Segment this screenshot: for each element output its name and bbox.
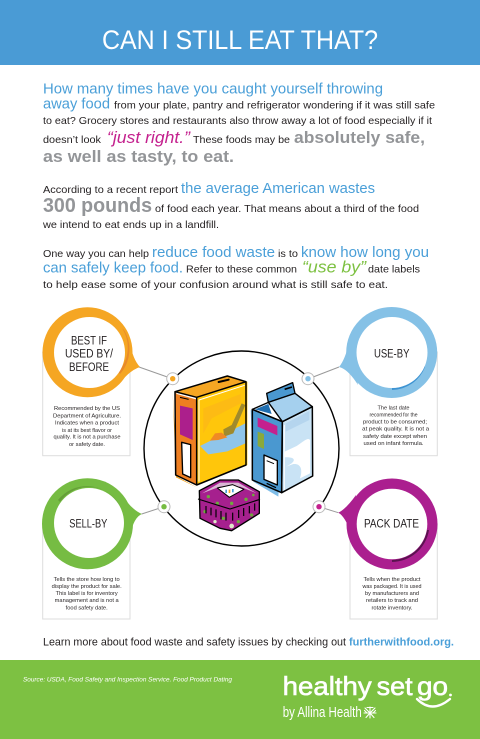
intro paragraph: as well as tasty, to eat. (43, 147, 234, 166)
description (362, 577, 422, 612)
marker: orange node (167, 373, 179, 385)
intro paragraph: absolutely safe, (294, 128, 425, 147)
advice paragraph: know how long you (301, 244, 429, 261)
marker: green node (158, 501, 170, 513)
description: retailers to track and (366, 598, 418, 604)
intro paragraph: from your plate, pantry and refrigerator wondering if it was still safe (114, 100, 435, 112)
description: Indicates when a product (55, 420, 119, 426)
logo: healthy set go by Allina Health: by Allina Health (283, 705, 362, 721)
label: USE-BY (374, 348, 410, 360)
description: Tells the store how long to (54, 577, 120, 583)
advice paragraph: can safely keep food. (43, 260, 183, 276)
advice paragraph: to help ease some of your confusion around what is still safe to eat. (43, 280, 388, 291)
advice paragraph: date labels (368, 264, 420, 276)
description: This label is for inventory (56, 591, 118, 597)
description (53, 406, 121, 448)
label (65, 335, 114, 374)
description: The last date (378, 406, 410, 412)
advice paragraph: Refer to these common (186, 264, 297, 276)
advice paragraph (43, 244, 429, 291)
description: food safety date. (66, 606, 108, 612)
description: display the product for sale. (52, 584, 122, 590)
description (52, 577, 122, 612)
call to action: Learn more about food waste and safety issues by checking out (43, 636, 347, 648)
statistic paragraph: 300 pounds (43, 194, 152, 217)
description: or safety date. (69, 442, 105, 448)
intro paragraph: doesn’t look (43, 135, 102, 146)
advice paragraph: “use by” (302, 258, 368, 276)
source note: Source: USDA, Food Safety and Inspection Service. Food Product Dating (23, 677, 232, 684)
description: Recommended by the US (54, 406, 120, 412)
description: by manufacturers and (365, 591, 419, 597)
description: recommended for the (370, 412, 418, 418)
icon: milk carton (251, 383, 313, 497)
logo: healthy set go by Allina Health: set (377, 671, 414, 701)
intro paragraph (43, 80, 435, 166)
illustration: food packages (173, 376, 313, 531)
logo: healthy set go by Allina Health: healthy (283, 671, 372, 701)
statistic paragraph: the average American wastes (181, 180, 375, 197)
panel: use-by (302, 307, 437, 456)
advice paragraph: is to (278, 249, 298, 260)
logo: healthy set go by Allina Health: go (417, 671, 448, 701)
icon: berry container (198, 480, 260, 531)
central circle (144, 351, 339, 546)
intro paragraph: away food (43, 96, 110, 112)
statistic paragraph: of food each year. That means about a third of the food (155, 204, 419, 215)
description: management and is not a (55, 598, 120, 604)
icon: Allina flower (364, 707, 376, 718)
title: CAN I STILL EAT THAT? (102, 25, 378, 55)
statistic paragraph (42, 180, 419, 231)
description: at peak quality. It is not a (362, 427, 430, 433)
description (362, 406, 430, 447)
description: used on infant formula. (364, 441, 424, 447)
intro paragraph: These foods may be (193, 135, 290, 146)
advice paragraph: One way you can help (43, 249, 149, 260)
label: SELL-BY (69, 519, 108, 531)
description: is at its best flavor or (62, 428, 112, 434)
label: BEFORE (69, 362, 109, 374)
statistic paragraph: we intend to eat ends up in a landfill. (42, 220, 219, 231)
header banner (0, 0, 480, 65)
label: USED BY/ (65, 349, 114, 361)
call to action: furtherwithfood.org. (349, 636, 454, 648)
panel: pack date (313, 478, 438, 619)
marker: magenta node (313, 501, 325, 513)
icon: cereal box (173, 376, 247, 487)
footer band (0, 660, 480, 739)
description: rotate inventory. (372, 606, 413, 612)
panel: sell-by (42, 478, 170, 619)
description: was packaged. It is used (362, 584, 422, 590)
intro paragraph: How many times have you caught yourself throwing (43, 80, 383, 98)
marker: blue node (302, 373, 314, 385)
label: PACK DATE (364, 519, 419, 531)
intro paragraph: to eat? Grocery stores and restaurants also throw away a lot of food especially if it (43, 116, 432, 127)
advice paragraph: reduce food waste (152, 244, 275, 261)
label: BEST IF (71, 335, 107, 347)
description: Tells when the product (364, 577, 421, 583)
logo: healthy set go by Allina Health (283, 671, 452, 721)
description: safety date except when (363, 434, 427, 440)
description: product to be consumed; (363, 420, 427, 426)
statistic paragraph: According to a recent report (43, 185, 178, 196)
panel: best if used by / before (42, 307, 179, 456)
description: Department of Agriculture. (53, 413, 121, 419)
description: quality. It is not a purchase (54, 435, 120, 441)
intro paragraph: “just right.” (107, 129, 192, 147)
